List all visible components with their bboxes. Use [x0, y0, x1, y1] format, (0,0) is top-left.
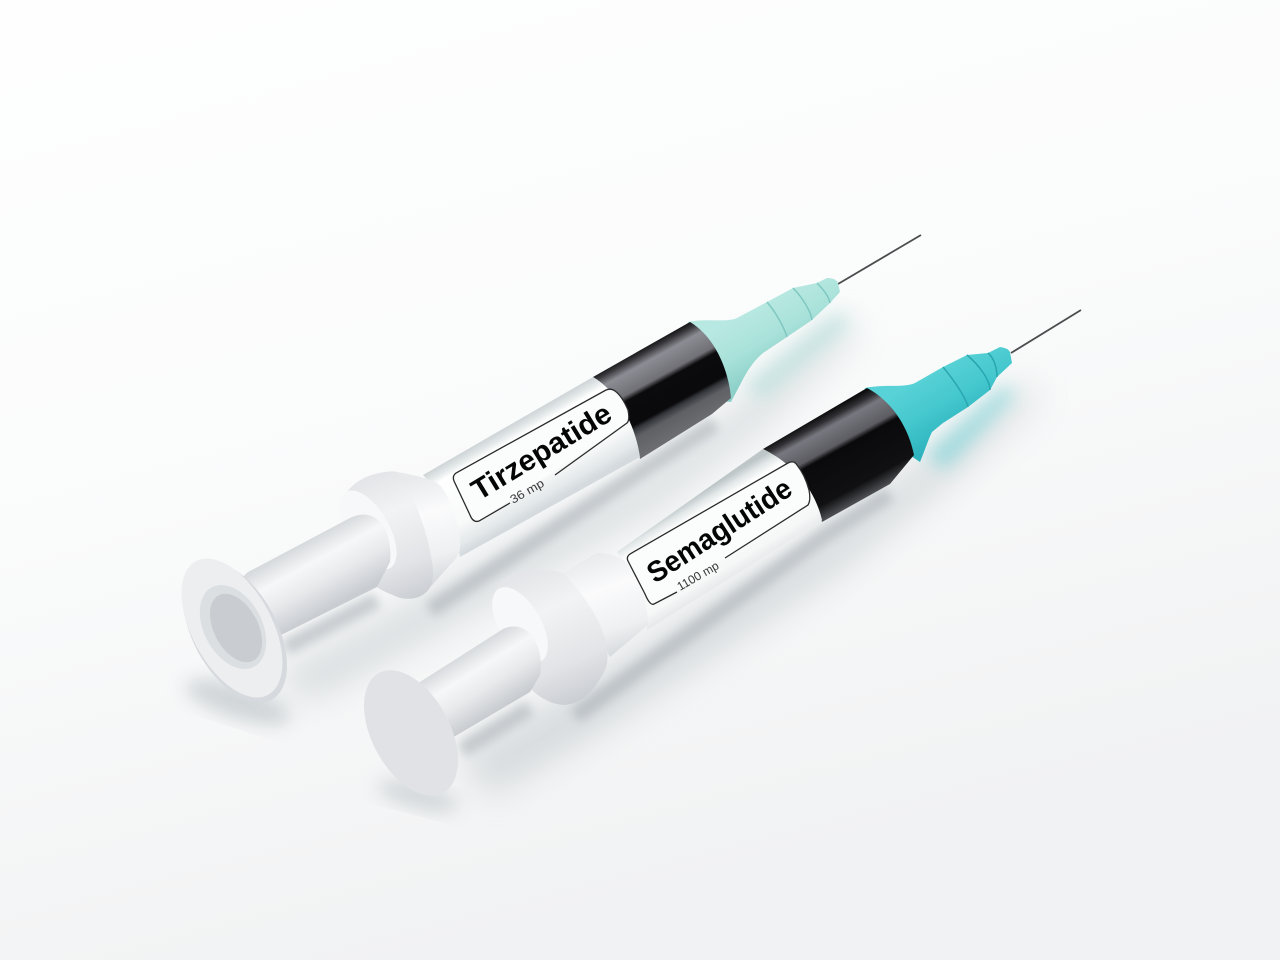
needle	[838, 235, 921, 284]
syringe: Tirzepatide	[161, 235, 921, 720]
black cartridge	[763, 388, 914, 522]
dose: 36 mp	[508, 476, 547, 507]
black cartridge	[593, 322, 731, 459]
drug name: Tirzepatide	[466, 398, 618, 507]
barrel	[423, 377, 640, 557]
plunger rod	[405, 626, 541, 752]
collar	[481, 553, 648, 705]
shadow: semaglutide syringe	[374, 385, 1040, 818]
label: Semaglutide	[627, 462, 810, 604]
drug name: Semaglutide	[641, 473, 798, 590]
barrel	[617, 449, 822, 630]
plunger rod	[236, 515, 390, 650]
collar	[328, 471, 460, 599]
label: Tirzepatide	[453, 389, 629, 521]
plunger flange: solid	[345, 655, 477, 811]
hub: saturated teal	[860, 347, 1012, 462]
shadow: tirzepatide syringe	[181, 310, 860, 734]
plunger flange with hole	[161, 542, 309, 720]
needle	[1011, 310, 1081, 353]
hub: pale teal	[680, 278, 840, 402]
syringe: Semaglutide	[345, 310, 1081, 811]
dose: 1100 mp	[674, 558, 722, 594]
